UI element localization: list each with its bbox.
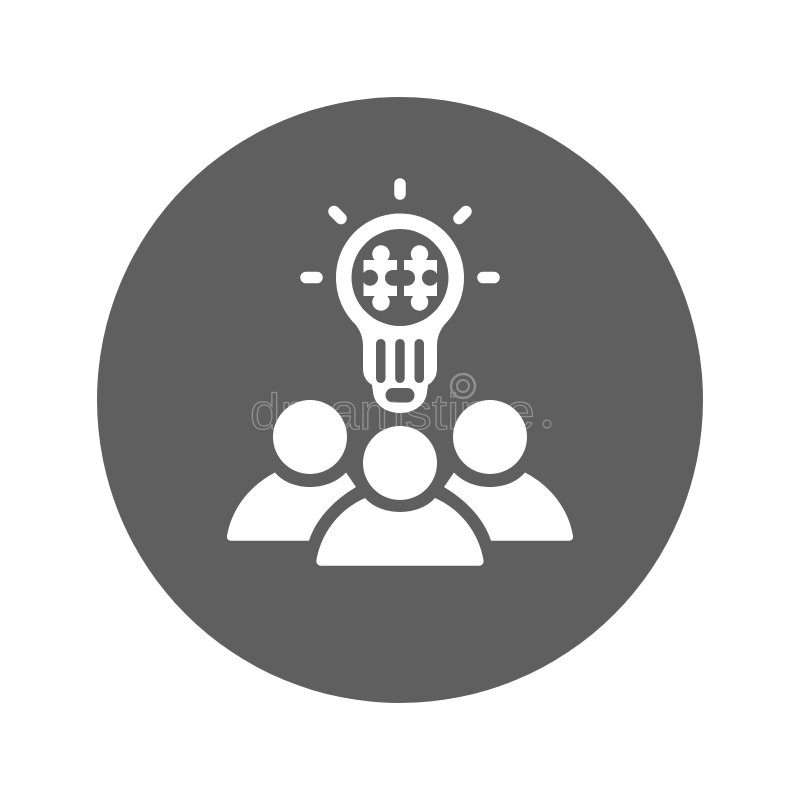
person: left (227, 400, 356, 541)
bulb base slots (376, 339, 424, 402)
person: right (444, 400, 573, 541)
watermark: dreamstime (250, 384, 535, 440)
bulb glass opening (352, 229, 448, 326)
bulb body (336, 214, 464, 413)
icon: light rays (306, 184, 494, 278)
icon: light bulb (336, 214, 464, 413)
puzzle pieces (362, 245, 438, 311)
grey circle badge (97, 97, 703, 703)
person: centre (316, 426, 484, 566)
